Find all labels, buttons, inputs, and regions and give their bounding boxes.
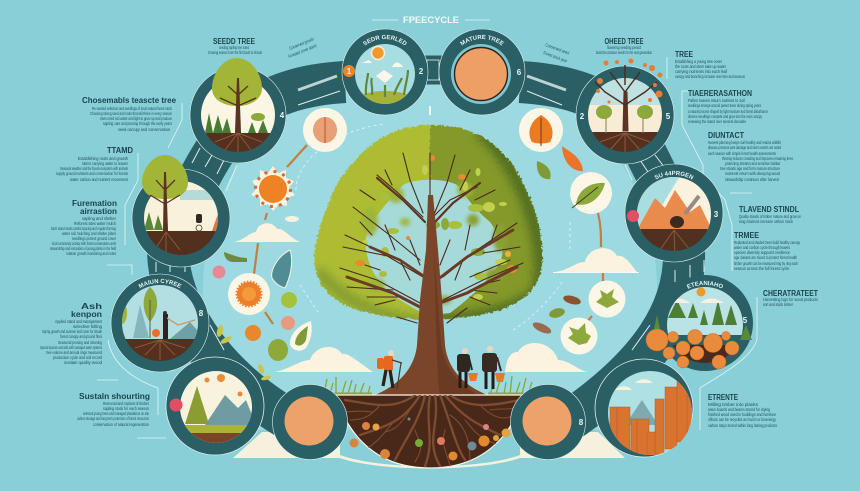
text: left block 3: Each stand needs careful spacing and regular thinning (51, 226, 116, 231)
small badges (212, 266, 297, 361)
text: ash kenpon: Applied stand and management (55, 319, 103, 324)
cycle road band (156, 60, 704, 420)
text: left block 3: water soil mulching and shelter plans (62, 231, 117, 236)
title: FPEECYCLE (403, 15, 459, 25)
text: diuntact (708, 131, 793, 182)
circle: pine valley (166, 357, 264, 455)
sun (251, 166, 295, 211)
cream leaf (290, 321, 312, 351)
sprigs (216, 324, 271, 381)
text: regeneration (688, 89, 768, 124)
text: etrente (708, 393, 778, 428)
top micro captions: Forest stock year (543, 50, 568, 64)
text: trmee (734, 231, 800, 271)
text: ash kenpon: selective felling (73, 324, 102, 329)
circle: seed tree: 4 (280, 111, 285, 120)
circle: sprout stage: 2 (419, 67, 424, 76)
text: seed tree: Growing season from the first buds to shoots (208, 50, 262, 55)
circle: sprout stage (342, 28, 428, 116)
circle: mountain stage: SU 44PRGEN (654, 170, 694, 180)
text: ash kenpon: forest canopy and ground flora (60, 334, 102, 339)
circle: left trunk slice (272, 384, 348, 460)
leaves in canopy (355, 155, 517, 300)
soil nutrients (350, 418, 510, 460)
text: left block 2: TTAMD (107, 146, 133, 155)
text: left block 2 (56, 146, 133, 182)
text: diuntact: DIUNTACT (708, 131, 744, 140)
top micro captions: Conserved seed (545, 42, 570, 56)
dashed path (296, 124, 385, 315)
right cloud (553, 248, 639, 273)
branches (340, 153, 523, 323)
text: diuntact: tree stands age and form mature structure (720, 166, 780, 171)
text: sustain: conservation of natural regeneration (93, 422, 149, 427)
connectors (254, 145, 307, 324)
text: etrente: Milling timber into planks (708, 402, 759, 407)
text: sustain: Sustaln shourting (79, 392, 150, 401)
leaf circles (560, 280, 626, 354)
circle: mountain stage: 3 (714, 210, 719, 219)
text: regeneration: TIAERERASATHON (688, 89, 752, 98)
text: ash kenpon: Seasonal pruning and cleaning (58, 340, 102, 345)
text: seed tree: SEEDD TREE (213, 37, 256, 46)
text: sustain: carbon storage and long term protection of forest resources (77, 416, 149, 421)
seed icon (303, 108, 347, 152)
text: etrente: carbon stays stored within long lasting products (708, 423, 778, 428)
text: left block 1: Chosemabls teascte tree (82, 96, 177, 105)
text: diuntact: thinning reduces crowding and improves remaining trees (722, 156, 793, 161)
lower right cloud (505, 343, 587, 372)
dashed paths (513, 222, 570, 330)
text: left block 3: local community activity with forest conservation work (52, 241, 116, 246)
circle: timber logs (646, 275, 753, 371)
top micro captions (288, 36, 570, 64)
text: diuntact: Harvest planning keeps soil healthy and retains wildlife (708, 140, 781, 145)
text: oheed tree (596, 37, 652, 55)
circle: third stage: 8 (199, 309, 204, 318)
big tree (314, 125, 542, 468)
text: cheratrateet: CHERATRATEET (763, 289, 818, 298)
text: ash kenpon: tree volume and annual rings measured (46, 350, 102, 355)
text: tlavend stindl: long rotations increase carbon stock (739, 219, 794, 224)
text: left block 2: Establishing roots and growth (78, 156, 128, 161)
text: tree: Establishing a young tree cover (675, 59, 722, 64)
text: ash kenpon: production cycle and soil record (53, 355, 102, 360)
circle: mature tree: 6 (517, 68, 522, 77)
text: diuntact: nutrients return with decaying wood (725, 171, 780, 176)
text: left block 3: rotation growth monitoring and notes (66, 251, 117, 256)
text: ash kenpon (40, 302, 103, 365)
text: left block 1 (82, 96, 177, 132)
top micro captions: Conserved growth (289, 36, 315, 51)
text: left block 3: sapling and shelter (82, 216, 116, 221)
text: left block 1: Re seeded selection and seedlings of local natural forest stock (92, 106, 172, 111)
text: left block 1: Choosing strong seed and roots that will thrive in every season (90, 111, 172, 116)
text: ash kenpon: kenpon (71, 310, 102, 319)
text: trmee: age classes are mixed to protect forest health (734, 255, 797, 260)
text: regeneration: diverse seedlings compete and grow into the next canopy (688, 114, 762, 119)
text: trmee: species diversity supports resilience (734, 250, 790, 255)
circle: timber logs: 5 (743, 316, 748, 325)
circle: seed tree (190, 58, 286, 163)
falling leaves (537, 146, 583, 179)
left icon chain (212, 108, 385, 381)
circle: right trunk slice: 8 (579, 418, 584, 427)
two gardeners (457, 346, 505, 389)
circle: flowering tree: 5 (666, 112, 671, 121)
circle: cut planks (595, 359, 695, 460)
text: regeneration: a natural process shaped by light moisture and forest disturbance (688, 109, 768, 114)
text: tree: carrying nutrients into each leaf (675, 69, 728, 74)
right icon chain (430, 106, 639, 372)
circle: flowering tree: 2 (580, 112, 585, 121)
text: sustain: Removal and replant of timber (103, 401, 149, 406)
text: ash kenpon: Special species and soils with managed water systems (40, 345, 102, 350)
title (372, 15, 490, 25)
text: diuntact: disease pressure pest damage and storm events are noted (708, 145, 781, 150)
text: left block 2: Seasonal weather and the forest ecosystem with animals (60, 166, 128, 171)
text: diuntact: each season with simple forest health assessments (708, 151, 776, 156)
text: oheed tree: flowering seeding period (607, 45, 641, 50)
connectors (587, 213, 603, 322)
text: cheratrateet: Harvesting logs for wood products (763, 297, 819, 302)
text: trmee: water and carbon cycle through leaves (734, 245, 791, 250)
text: seed tree: seeding sapling tree notes (219, 45, 249, 50)
text: etrente: finished wood used in buildings and furniture (708, 412, 776, 417)
text: left block 3: airrastion (80, 207, 117, 216)
text: regeneration: Fallen leaves return nutrient to soil (688, 98, 745, 103)
circle: mature tree: MATURE TREE (460, 34, 504, 46)
teal leaf (272, 250, 292, 288)
text: diuntact: stewardship continues after harvest (725, 177, 780, 182)
text: sustain (77, 392, 150, 427)
text: tlavend stindl: TLAVEND STINDL (739, 205, 799, 214)
text: left block 3 (50, 199, 117, 256)
text: left block 1: seed canopy and conservation (118, 127, 170, 132)
text: tree: the roots and stem take up water (675, 64, 726, 69)
canopy (314, 125, 542, 322)
text: sustain: sapling stock for each season (103, 406, 149, 411)
circle: third stage: MAIUN CYREE (138, 278, 182, 288)
text: trmee: TRMEE (734, 231, 760, 240)
cream ground band (233, 432, 625, 468)
text: etrente: ETRENTE (708, 393, 739, 402)
text: left block 3: stewardship and restoration of young plants in the field (50, 246, 116, 251)
text: left block 3: Reforest sites water mulch (74, 221, 116, 226)
grass (322, 376, 535, 394)
text: cheratrateet (763, 289, 819, 307)
text: left block 3: seedlings protect ground cover (72, 236, 116, 241)
inner sky panel (203, 84, 657, 430)
circle: sprout stage: 1 (347, 67, 352, 76)
text: left block 2: water carbon and nutrient movement (70, 177, 129, 182)
circle: mature tree (438, 28, 526, 116)
orange leaf icon (519, 108, 563, 152)
text: trmee: timber growth can be measured ring by ring each (734, 261, 798, 266)
text: regeneration: seedlings emerge around parent trees during spring years (688, 103, 761, 108)
text: ash kenpon: Ash (81, 302, 102, 311)
text: tlavend stindl (739, 205, 801, 224)
text: sustain: selected young trees and managed plantations on site (83, 411, 149, 416)
trunk and root flare (372, 195, 490, 396)
circle: timber logs: ETEANIAHO (686, 280, 723, 289)
text: tree: canopy and branching increase over time and seasons (675, 74, 745, 79)
text: diuntact: protecting streams and sensitive habitat (725, 161, 781, 166)
circle: third stage (110, 274, 210, 372)
text: left block 2: supply ground nutrients and conservation for forests (56, 171, 129, 176)
green leaf icon (570, 172, 612, 214)
text: oheed tree: branches produce seeds for the next generation (596, 50, 652, 55)
text: etrente: sawn boards and beams stored for drying (708, 407, 770, 412)
text: trmee: Replanted and shaded trees build healthy canopy (734, 240, 800, 245)
text: ash kenpon: sustain quality wood (64, 360, 102, 365)
text: trmee: season across the full forest cycle (734, 266, 789, 271)
text: etrente: offcuts can be recycled as mulch or bioenergy (708, 417, 777, 422)
text: regeneration: renewing the stand over several decades (688, 119, 747, 124)
cloud (233, 216, 300, 242)
text: left block 2: stems carrying water to leaves (82, 161, 129, 166)
small plane (224, 252, 247, 262)
text: left block 3: Furemation (72, 199, 117, 208)
circle: second tree (132, 155, 232, 267)
text: ash kenpon: Spring growth and summer leaf cover for shade (42, 329, 102, 334)
text: left block 1: sapling care and pruning through the early years (103, 121, 173, 126)
text: seed tree (208, 37, 262, 55)
thin leader lines (97, 57, 757, 438)
circle: right trunk slice (510, 384, 586, 460)
text: tlavend stindl: Quality stands of timber mature and grow on (739, 214, 801, 219)
circle: flowering tree (576, 58, 674, 168)
circle: mountain stage (624, 164, 724, 262)
lower left cloud (275, 347, 373, 372)
circle: sprout stage: SEDR GERLED (363, 34, 407, 46)
text: tree (675, 50, 745, 79)
seeds (531, 294, 582, 336)
text: left block 1: trees need soil water and light to grow up and produce (100, 116, 172, 121)
soil with roots (335, 395, 525, 468)
text: oheed tree: OHEED TREE (604, 37, 644, 46)
canopy openings (366, 180, 502, 314)
text: cheratrateet: sort and stack timber (763, 302, 793, 307)
sun disc (228, 273, 270, 315)
top micro captions: Forested cover stand (288, 43, 318, 59)
hiker (377, 350, 402, 389)
canopy green washes (362, 183, 507, 304)
text: tree: TREE (675, 50, 694, 59)
